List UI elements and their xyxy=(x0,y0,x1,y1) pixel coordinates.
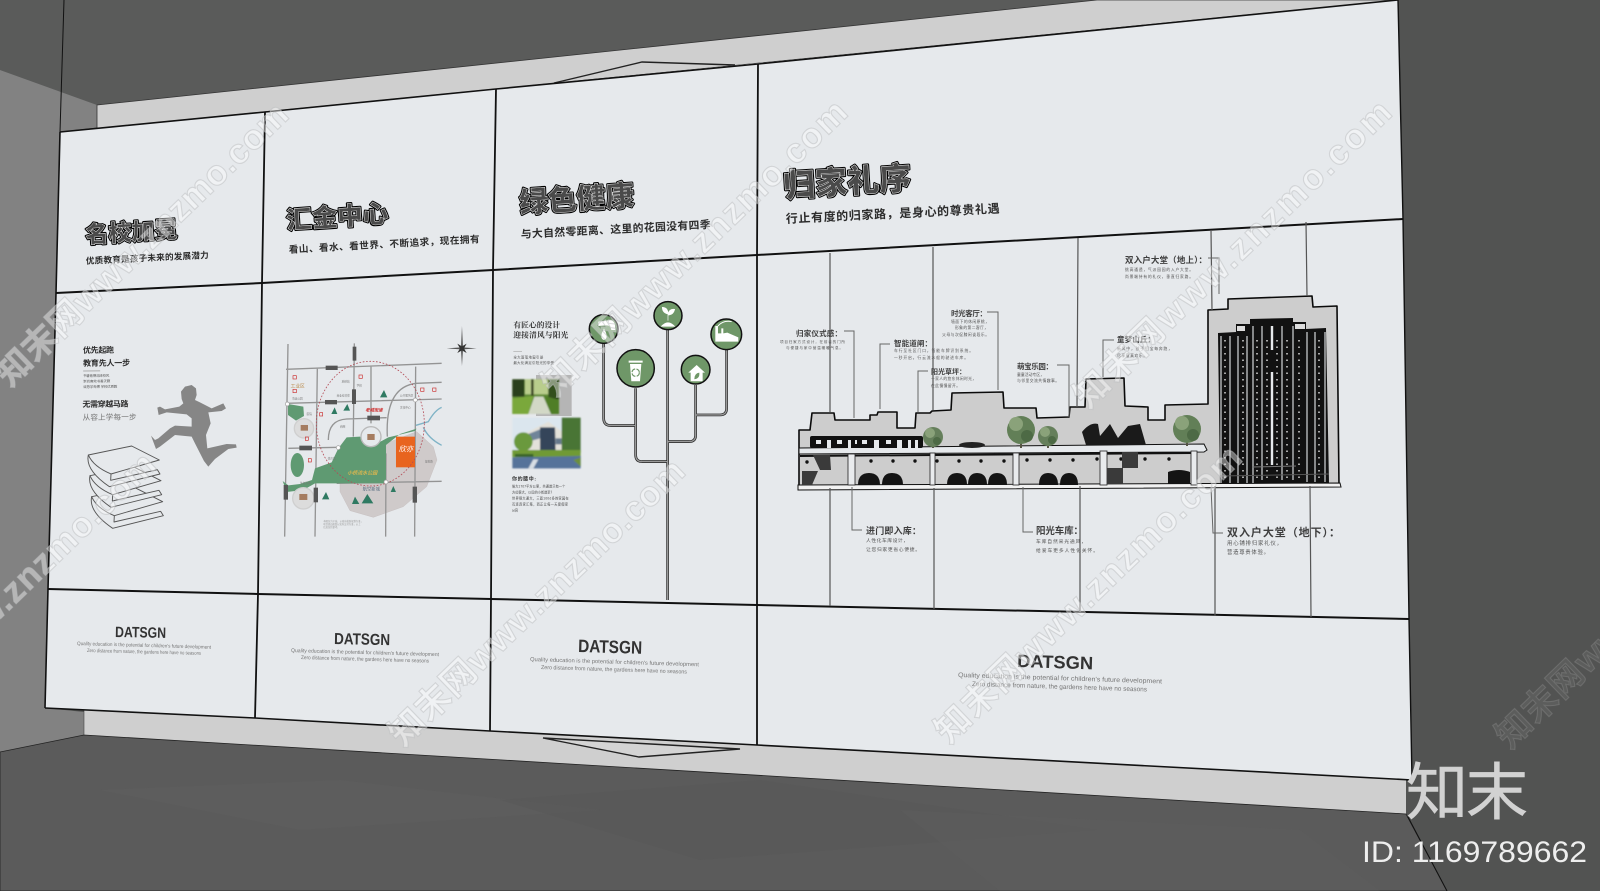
footer brand: panel 3: Quality education is the potential for children's future development xyxy=(530,657,699,668)
deck slab xyxy=(799,444,1207,454)
footer brand: panel 2: Quality education is the potential for children's future development xyxy=(291,648,440,658)
icon: factory circle xyxy=(711,319,742,350)
label: smart gate: 一秒开启。行云流水般的驶进车库。 xyxy=(894,355,968,360)
text block: head start: 优先起跑 xyxy=(83,345,114,355)
footer brand: panel 1: Quality education is the potential for children's future development xyxy=(77,641,212,651)
map: site name: 欣亦 xyxy=(399,445,415,454)
map: place labels: 商圈 xyxy=(340,424,346,428)
title 2: 汇金中心 xyxy=(285,199,389,235)
label: smart gate: 智能道闸： xyxy=(894,338,932,348)
vertical panel seams xyxy=(830,222,1311,617)
footer brand: panel 4: Zero distance from nature, the gardens here have no seasons xyxy=(972,681,1148,694)
map: green tree markers xyxy=(322,390,396,504)
map: dashed radius xyxy=(316,361,424,486)
photo: modern building xyxy=(512,418,581,468)
diamond on ceiling strip xyxy=(554,62,735,83)
map: grey development blob xyxy=(340,432,437,517)
wall panels board xyxy=(45,0,1412,780)
label: sunny lawn xyxy=(931,367,976,388)
watermarks: 知末网www.znzmo.com xyxy=(534,92,855,404)
text block: your waist: 从容 xyxy=(512,507,519,512)
label: double lobby underground: 用心铺排归家礼仪， xyxy=(1227,539,1282,547)
label: dream hill: 童梦山丘： xyxy=(1117,334,1155,344)
map: place labels: 小桥流水公园 xyxy=(347,470,378,477)
watermarks: 知末网www.znzmo.com xyxy=(927,438,1249,751)
subtitle 2: 看山、看水、看世界、不断追求，现在拥有 xyxy=(288,233,480,256)
label: kids park: 与邻里交流共情趣事。 xyxy=(1017,378,1059,383)
label: time lounge: 墙面下的休闲原桃， xyxy=(951,319,989,324)
label: sunny garage xyxy=(1036,525,1098,554)
title 1: 名校加冕 xyxy=(85,216,178,248)
text block: head start: 书香育德润泽校风 xyxy=(83,373,110,378)
ceiling xyxy=(0,0,1097,105)
text block: your waist: 互连连家汇集，而正让每一天度假家 xyxy=(512,501,569,506)
title 3: 绿色健康 xyxy=(518,178,635,220)
text block: your waist: 世界很大通大，三面100d多的家园在 xyxy=(512,495,569,500)
basement ceiling xyxy=(800,453,1192,456)
footer brand: panel 2: DATSGN xyxy=(334,631,390,649)
map: place labels: 市政公园 xyxy=(292,396,303,400)
ceiling lamps xyxy=(805,457,1171,464)
footer brand: panel 4: DATSGN xyxy=(1017,651,1093,673)
map: grey landmark circles xyxy=(293,419,381,509)
footer brand: panel 1 xyxy=(77,624,212,657)
watermarks: 知末网www.znzmo.com xyxy=(381,451,693,754)
label: ceremony: 归家仪式感： xyxy=(796,328,842,338)
left wall xyxy=(0,70,97,752)
map: place labels: 学校 xyxy=(357,384,362,388)
trees xyxy=(923,415,1201,448)
label: sunny lawn: 一家人的悠东休闲时光， xyxy=(931,376,976,381)
label: kids park xyxy=(1017,361,1059,383)
label: sunny lawn: 在此慢慢留开。 xyxy=(931,383,960,388)
tree diagram branches xyxy=(604,330,727,600)
map: legend small print xyxy=(323,519,363,529)
title 3: 绿色健康 xyxy=(518,178,635,220)
text block: your waist xyxy=(512,475,569,512)
map: road labels xyxy=(284,347,417,503)
text block: head start: 崇尚高效书香天籁 xyxy=(83,378,111,383)
map: red markers xyxy=(293,375,436,462)
label: double lobby above ground: 双入户大堂（地上）： xyxy=(1125,255,1207,265)
footer brand: panel 2 xyxy=(291,631,440,665)
lawn figures xyxy=(959,442,985,448)
label: double lobby underground xyxy=(1227,525,1340,556)
floor xyxy=(0,735,1447,891)
label: direct garage entry: 让您归家更省心便捷。 xyxy=(866,546,920,553)
heading: design xyxy=(513,319,569,365)
label: ceremony: 项目归家方式设计，在前者的门所 xyxy=(780,339,845,344)
label: double lobby above ground xyxy=(1125,255,1207,279)
map: legend small print: 本图仅为示意，以政府批准规划为准， xyxy=(323,519,363,523)
text block: head start: 无需穿越马路 xyxy=(82,399,128,409)
footer brand: panel 4 xyxy=(958,651,1162,694)
text block: your waist: 方位很大，以后的小街道至？ xyxy=(512,489,554,494)
label: time lounge: 时光客厅： xyxy=(951,308,987,318)
label: time lounge xyxy=(942,308,989,337)
label: sunny garage: 车库自然采光通风， xyxy=(1036,538,1086,545)
label: ceremony: 与便捷与家中营温暖暖气息。 xyxy=(786,345,843,350)
map: place labels: 航空新城 xyxy=(363,485,381,492)
map: place labels: 文化中心 xyxy=(400,406,411,410)
subtitle 1: 优质教育是孩子未来的发展潜力 xyxy=(86,249,209,266)
icon: sprout circle xyxy=(654,302,682,330)
text block: head start xyxy=(82,345,137,422)
lower wall strip xyxy=(84,708,1406,814)
label: double lobby above ground: 挑高通透，气派园园的入户大堂。 xyxy=(1125,267,1193,272)
basement pillars xyxy=(848,451,1197,485)
label: smart gate xyxy=(894,338,973,360)
icon: jumping child silhouette xyxy=(151,385,237,467)
title 4: 归家礼序 xyxy=(782,160,912,204)
label: time lounge: 形象的第二客厅， xyxy=(955,325,988,330)
label: dream hill: 新风中，孩子们宝每奔跑， xyxy=(1117,346,1172,351)
panel grid lines xyxy=(45,0,1412,780)
footer brand: panel 3 xyxy=(530,636,699,676)
footer brand: panel 3: Zero distance from nature, the gardens here have no seasons xyxy=(541,665,687,676)
label: ceremony xyxy=(780,328,845,350)
label: direct garage entry: 人性化车库设计， xyxy=(866,537,908,544)
map: place labels: 公共服务区 xyxy=(400,394,414,398)
heading: design: 迎接清风与阳光 xyxy=(513,329,569,339)
subtitle 3: 与大自然零距离、这里的花园没有四季 xyxy=(520,217,711,241)
map: orange site block xyxy=(396,437,415,467)
title 1: 名校加冕 xyxy=(85,216,178,248)
footer brand: panel 1: Zero distance from nature, the gardens here have no seasons xyxy=(87,648,201,657)
base slab xyxy=(798,483,1341,490)
label: kids park: 童童活动专区， xyxy=(1017,372,1044,377)
subtitle 4: 行止有度的归家路，是身心的尊贵礼遇 xyxy=(785,201,1000,226)
label: direct garage entry xyxy=(866,525,921,553)
label: dream hill xyxy=(1117,334,1172,358)
title 4: 归家礼序 xyxy=(782,160,912,204)
footer brand: panel 2: Zero distance from nature, the gardens here have no seasons xyxy=(301,655,429,665)
brand logo: 知末 xyxy=(1406,759,1528,828)
image id: ID: 1169789662 xyxy=(1362,836,1587,869)
location map xyxy=(283,326,477,537)
panel 4: homecoming sequence xyxy=(780,160,1341,617)
stairs xyxy=(802,452,1138,485)
photo: garden path xyxy=(512,375,572,416)
label: sunny garage: 给爱车更多人性化关怀。 xyxy=(1036,547,1098,554)
map: place labels: 规划路 xyxy=(425,460,433,464)
label: double lobby underground: 营造尊贵体验。 xyxy=(1227,548,1269,556)
map: place labels: 商业综合体 xyxy=(337,394,350,398)
heading: design: 有匠心的设计 xyxy=(513,319,560,329)
label: double lobby above ground: 尚景端持有的礼仪，垂直归家路。 xyxy=(1125,274,1193,279)
residential tower xyxy=(1218,318,1329,484)
title 2: 汇金中心 xyxy=(285,199,389,235)
map: place labels: 医院 xyxy=(307,412,312,416)
label: smart gate: 车行至社区门口，智能车牌识别系统。 xyxy=(894,348,973,353)
skyline section drawing xyxy=(798,296,1341,490)
text block: head start: 教育先人一步 xyxy=(83,358,130,368)
map: legend small print: 信息仅供参考。 xyxy=(323,525,340,529)
label: kids park: 萌宝乐园： xyxy=(1017,361,1053,371)
map: place labels: 体育馆 xyxy=(328,456,336,460)
parked cars xyxy=(858,470,1190,485)
heading: design: 全大面落地窗引景 xyxy=(513,354,544,359)
label: time lounge: 父母与次促膝闲谈段乐。 xyxy=(942,332,989,337)
panel 3: green and healthy xyxy=(512,178,742,600)
label: sunny garage: 阳光车库： xyxy=(1036,525,1083,537)
playground structure xyxy=(1082,424,1146,445)
footer brand: panel 3: DATSGN xyxy=(578,636,642,658)
map: roads xyxy=(285,343,442,537)
icon: compass star xyxy=(447,326,477,366)
text block: head start: 诚恳学苑博 学校优质教 xyxy=(83,384,118,389)
text block: your waist: 偌大1707平方公里，共通道只有一个 xyxy=(512,483,566,488)
map: legend small print: 项目周边配套以实际交付为准，以上 xyxy=(323,522,361,526)
watermarks: 知末网www.znzmo.com xyxy=(1066,92,1399,416)
label: dream hill: 尽享童真欢乐。 xyxy=(1117,353,1147,358)
panel 1: prestigious schools xyxy=(82,216,237,528)
text block: head start: 从容上学每一步 xyxy=(83,412,137,422)
map: place labels: 地铁站 xyxy=(342,379,350,383)
map: landmark buildings xyxy=(299,425,375,500)
label: sunny lawn: 阳光草坪： xyxy=(931,367,966,376)
heading: design: 最大化满足引阳光的享受 xyxy=(513,360,554,365)
icon: house circle xyxy=(681,355,710,384)
icon: water tap circle xyxy=(589,315,618,343)
icon: recycling bin circle xyxy=(617,350,654,387)
map: junction dots xyxy=(285,398,417,484)
map: place labels: 工业区 xyxy=(291,382,305,388)
floor junction corner xyxy=(83,710,85,735)
text block: your waist: 你的腰中: xyxy=(512,475,536,482)
low-rise building band xyxy=(810,436,923,448)
map: place labels xyxy=(291,379,433,492)
icon: stacked books xyxy=(88,446,163,528)
diamond on floor strip xyxy=(543,738,740,757)
label: direct garage entry: 进门即入库： xyxy=(866,525,921,536)
map: place labels: 生态湿地 xyxy=(300,481,311,485)
map: green park and river corridor xyxy=(283,429,417,492)
panel 2: location map xyxy=(283,199,480,537)
thin corner line xyxy=(60,0,64,132)
map: river xyxy=(416,407,442,445)
map: place labels: 老城街道 xyxy=(365,408,383,413)
footer brand: panel 4: Quality education is the potential for children's future development xyxy=(958,672,1162,685)
floor edge line xyxy=(1408,817,1447,891)
label: double lobby underground: 双入户大堂（地下）： xyxy=(1227,525,1340,539)
watermarks xyxy=(0,92,1600,756)
upper wall strip xyxy=(60,0,1398,132)
footer brand: panel 1: DATSGN xyxy=(115,624,166,642)
leader lines xyxy=(844,258,1223,533)
